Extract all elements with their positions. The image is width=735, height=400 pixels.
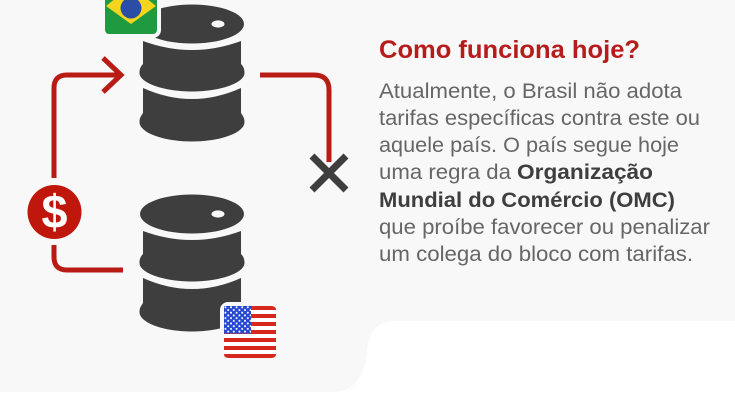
body text: uma regra da <box>379 161 511 184</box>
body text: um colega do bloco com tarifas. <box>379 243 693 266</box>
icon: dollar coin <box>28 185 82 239</box>
body text: Atualmente, o Brasil não adota <box>379 80 682 103</box>
body text <box>379 80 710 266</box>
icon: X mark <box>312 156 346 190</box>
arrow: payment flow to Brazil barrel <box>54 58 121 178</box>
icon: oil barrel Brazil <box>140 4 244 142</box>
body text: tarifas específicas contra este ou <box>379 107 700 130</box>
connector: USA barrel to dollar <box>54 245 123 270</box>
body text: Mundial do Comércio (OMC) <box>379 189 675 212</box>
arrow: blocked flow from Brazil barrel <box>260 75 329 162</box>
body text: aquele país. O país segue hoje <box>379 134 679 157</box>
icon: dollar coin: $ <box>42 185 68 238</box>
body text: que proíbe favorecer ou penalizar <box>379 216 710 239</box>
icon: oil barrel USA <box>140 194 244 332</box>
icon: Brazil flag <box>101 0 161 38</box>
body text: Organização <box>517 161 653 184</box>
heading: Como funciona hoje? <box>379 36 640 64</box>
icon: USA flag <box>220 302 280 362</box>
